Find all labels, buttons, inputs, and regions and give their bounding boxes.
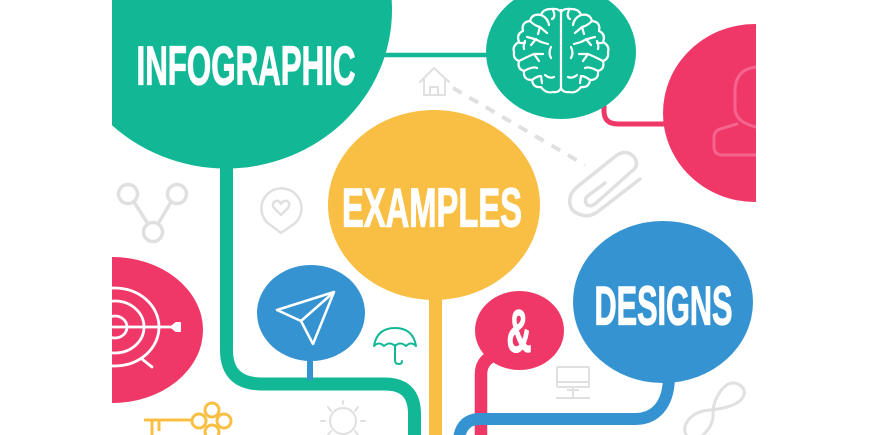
- icon: key: [144, 403, 231, 435]
- icon: brain: [514, 9, 608, 92]
- teal circle: [112, 0, 392, 168]
- panel: examples circle: [328, 110, 540, 300]
- icon: paperclip: [570, 152, 640, 216]
- panel: paper plane circle: [257, 265, 365, 361]
- dashed connector line: [453, 88, 585, 165]
- heading: examples: EXAMPLES: [342, 176, 522, 238]
- pink circle: [112, 257, 203, 403]
- icon: target: [112, 286, 181, 368]
- icon: paper plane: [277, 292, 334, 344]
- blue circle: [573, 221, 753, 383]
- panel: target circle: [112, 257, 203, 403]
- icon: infinity: [685, 383, 744, 435]
- heading: ampersand: &: [506, 298, 532, 365]
- icon: monitor: [556, 367, 590, 398]
- panel: infographic circle: [112, 0, 392, 168]
- icon: share nodes: [118, 184, 186, 242]
- panel: ampersand circle: [475, 291, 564, 370]
- icon: person: [714, 67, 760, 155]
- heading: infographic: INFOGRAPHIC: [136, 34, 356, 96]
- teal circle: [486, 0, 636, 119]
- panel: person circle: [663, 24, 756, 202]
- connector: blue designs path: [459, 376, 669, 435]
- icon: house: [420, 68, 449, 95]
- connector: pink brain to person: [602, 105, 664, 126]
- panel: brain circle: [486, 0, 636, 119]
- yellow circle: [328, 110, 540, 300]
- connector: teal main path: [226, 160, 414, 435]
- infographic illustration: [112, 0, 756, 435]
- connector: pink ampersand stem: [481, 356, 492, 435]
- pink circle: [475, 291, 564, 370]
- connector: blue plane stem: [307, 360, 313, 380]
- icon: chat heart: [262, 188, 302, 233]
- panel: designs circle: [573, 221, 753, 383]
- connector: yellow stem: [429, 290, 442, 435]
- icon: sun: [321, 401, 365, 435]
- heading: designs: DESIGNS: [594, 274, 732, 336]
- blue circle: [257, 265, 365, 361]
- connector: teal top: [380, 53, 495, 57]
- pink circle: [663, 24, 756, 202]
- icon: umbrella: [374, 328, 416, 364]
